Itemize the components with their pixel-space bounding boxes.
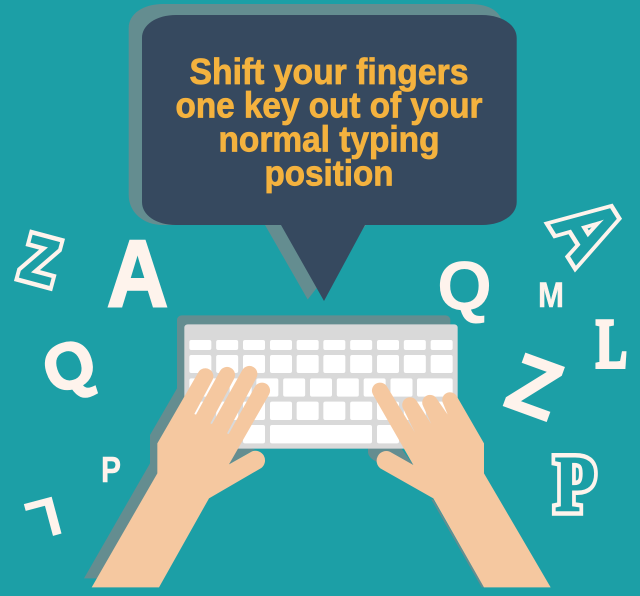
letter A outlined top right: A [534, 182, 640, 276]
right hand [372, 383, 551, 587]
illustration shadow [84, 315, 484, 587]
letter Q left: Q [34, 323, 104, 408]
floating letters [14, 182, 640, 551]
letter A outlined top right: A [534, 182, 640, 276]
letter Z large: Z [495, 336, 573, 439]
headline: position [264, 152, 394, 194]
letter P small: P [101, 449, 121, 490]
headline: Shift your fingers [190, 51, 468, 92]
letter L rotated: L [20, 485, 67, 551]
bubble shadow [129, 4, 503, 300]
letter P outlined: P [554, 440, 596, 529]
letter Z outlined top left: Z [14, 221, 66, 299]
keyboard and hands illustration [84, 315, 551, 587]
keys [189, 340, 453, 443]
speech bubble [129, 4, 517, 301]
keyboard [184, 324, 458, 449]
keyboard body [184, 324, 458, 449]
headline: one key out of your [176, 84, 482, 126]
headline: normal typing [218, 118, 440, 160]
headline [176, 51, 482, 194]
letter Z outlined top left: Z [14, 221, 66, 299]
left hand [92, 366, 270, 587]
letter A large: A [107, 221, 168, 327]
letter Q stamped: Q [437, 247, 492, 325]
letter P outlined: P [554, 440, 596, 529]
bubble body [142, 15, 517, 301]
letter M small: M [538, 276, 564, 315]
